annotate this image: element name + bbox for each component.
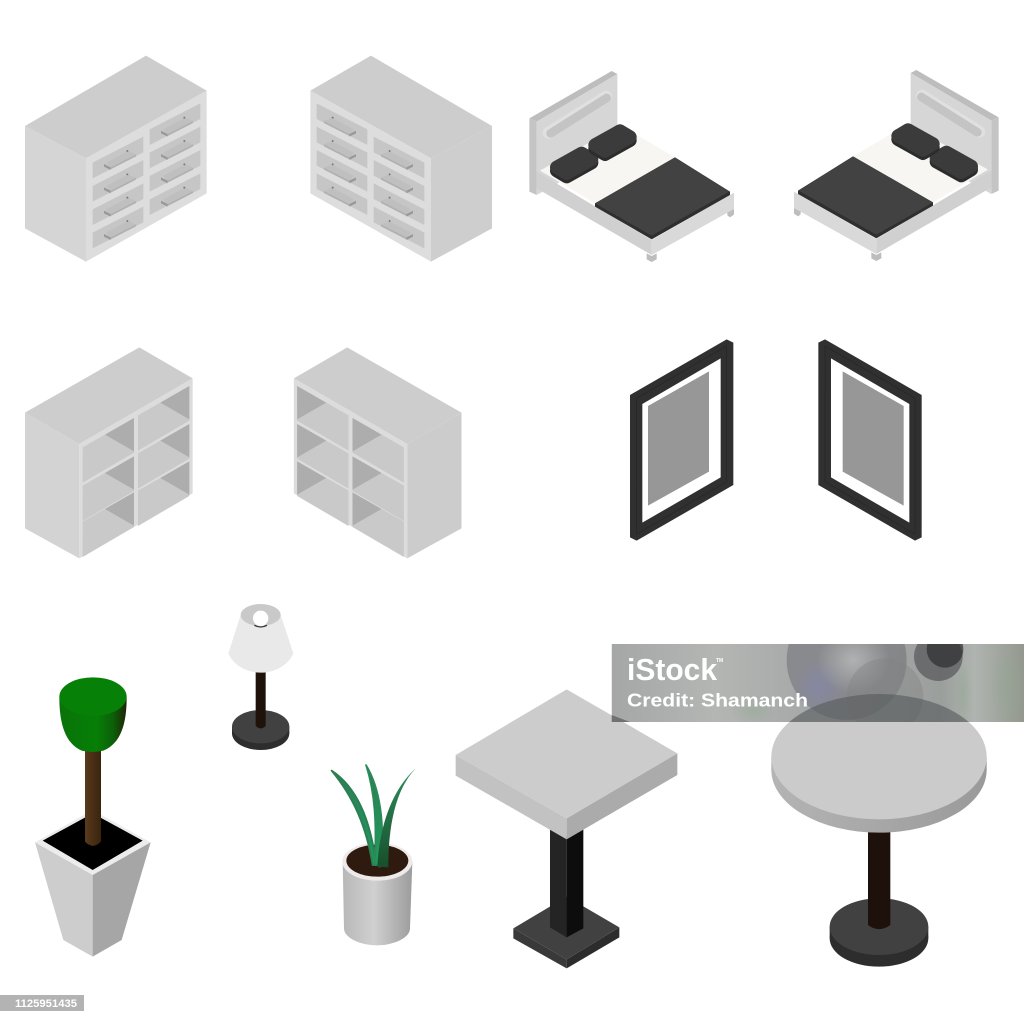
round table leg [868,827,890,929]
round table [771,694,987,967]
dresser facing left [310,56,492,262]
shelf top and compartments [25,347,193,558]
id tag background [0,995,84,1011]
table top [456,689,677,839]
shelf side panel [25,413,79,558]
shelf unit facing right [25,347,193,558]
round table base [830,898,928,967]
plant pot [342,843,412,945]
plant leaves [332,765,416,867]
trademark mark: TM [716,658,723,664]
trunk [85,747,101,846]
watermark banner [612,644,1024,722]
round table top [771,694,987,833]
tree crown [59,677,127,752]
small potted plant [332,765,416,945]
iStock logo text: iStock [627,652,718,687]
table lamp [228,604,293,750]
shelf side panel [407,413,462,558]
dresser top and drawers [310,56,492,262]
lamp pole [256,670,266,728]
dresser side panel [25,126,86,262]
dresser facing right [25,56,207,262]
table base [513,897,619,968]
shelf unit facing left [294,347,462,558]
dresser side panel [431,126,492,262]
potted tree [35,677,151,957]
bed facing right [529,71,734,262]
id number: 1125951435 [15,998,77,1010]
dresser top and drawers [25,56,207,262]
banner background [612,644,1024,722]
lamp base [232,710,289,750]
credit text: Credit: Shamanch [627,690,808,710]
square table [456,689,677,968]
table leg [550,827,583,937]
picture frame right [818,339,922,541]
planter [35,810,151,957]
shelf top and compartments [294,347,462,558]
image id tag [0,995,84,1011]
bed facing left [794,70,999,261]
lamp shade [228,604,293,673]
picture frame left [630,339,733,541]
